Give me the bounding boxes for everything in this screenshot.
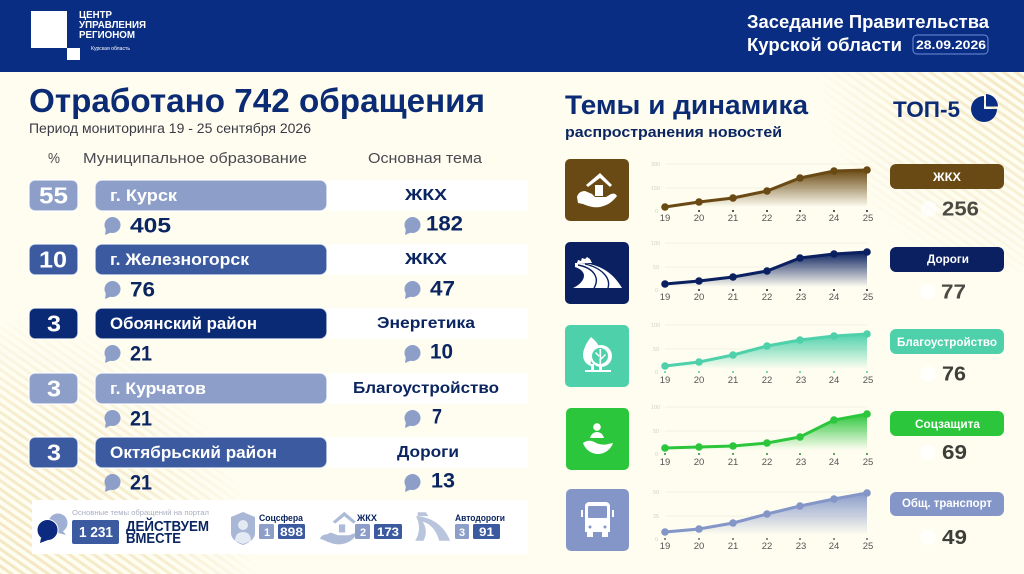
value: 77 [941, 280, 966, 304]
chart row: ЖКХ [565, 159, 1004, 224]
line chart: 24 [829, 292, 839, 303]
topic: Соцсфера: 898 [280, 525, 303, 539]
row: Курчатов: г. Курчатов [110, 380, 206, 398]
label pill [890, 411, 1004, 436]
line chart: 25 [863, 213, 873, 224]
chart row: Благоустройство [565, 323, 1004, 387]
line chart: 0 [655, 452, 658, 458]
line chart: 21 [728, 375, 738, 386]
value [920, 280, 966, 304]
line chart: 50 [653, 265, 659, 271]
row: Железногорск: ЖКХ [404, 251, 447, 268]
line chart: 23 [796, 375, 806, 386]
line chart: 50 [653, 429, 659, 435]
row: Железногорск [29, 244, 528, 302]
row: Курск: ЖКХ [404, 187, 447, 204]
line chart [651, 241, 873, 303]
row: Обоянский район: 21 [130, 342, 152, 366]
line chart: 19 [660, 541, 670, 552]
line chart: 25 [863, 375, 873, 386]
topic: Автодороги: Автодороги [455, 513, 505, 523]
icon: road [565, 242, 629, 304]
line chart: 21 [728, 541, 738, 552]
line chart: 25 [863, 541, 873, 552]
line chart [651, 323, 873, 386]
icon: house in hand [565, 159, 629, 221]
line chart: 100 [651, 405, 660, 411]
value [920, 526, 967, 549]
topic: Соцсфера [259, 513, 305, 539]
logo: Курская область [91, 46, 130, 52]
right heading: Темы и динамика [565, 90, 809, 120]
row: Железногорск: 47 [430, 276, 455, 300]
line chart: 50 [653, 347, 659, 353]
label pill: Общ. транспорт [902, 496, 992, 510]
line chart: 22 [762, 457, 772, 468]
line chart: 20 [694, 292, 704, 303]
line chart: 0 [655, 370, 658, 376]
row: Октябрьский район: Дороги [397, 444, 459, 461]
value [921, 198, 979, 220]
label pill: Соцзащита [915, 417, 980, 431]
line chart: 20 [694, 457, 704, 468]
line chart: 21 [728, 213, 738, 224]
value: 256 [942, 198, 979, 220]
line chart: 24 [829, 457, 839, 468]
line chart: 19 [660, 213, 670, 224]
chart row: Соцзащита [566, 405, 1004, 470]
value: 69 [942, 441, 967, 464]
row: Обоянский район: 10 [430, 340, 453, 364]
date badge: 28.09.2026 [916, 38, 986, 52]
logo [31, 10, 146, 60]
line chart: 23 [796, 292, 806, 303]
top-5 label: ТОП-5 [893, 97, 960, 122]
line chart: 20 [694, 375, 704, 386]
portal total: 1 231 [79, 524, 113, 541]
label pill: Дороги [927, 252, 969, 266]
right heading [565, 90, 809, 141]
label pill: ЖКХ [932, 170, 961, 184]
icon: pie chart [971, 94, 998, 122]
topic: ЖКХ: 173 [377, 525, 399, 539]
meeting title [747, 12, 990, 55]
line chart: 100 [651, 323, 660, 329]
value: 76 [942, 362, 966, 386]
value [920, 441, 967, 464]
header band [0, 0, 1024, 72]
table header [48, 150, 483, 167]
icon: person in hand [566, 408, 629, 470]
topic: Автодороги: 3 [459, 527, 465, 539]
row: Октябрьский район: Октябрьский район [110, 444, 277, 462]
line chart: 300 [651, 162, 660, 168]
line chart: 20 [694, 541, 704, 552]
table header: Основная тема [368, 150, 483, 167]
logo: РЕГИОНОМ [79, 30, 135, 41]
line chart: 0 [655, 209, 658, 215]
topic: Автодороги: 91 [479, 525, 494, 539]
line chart [651, 162, 873, 224]
row: Октябрьский район: 13 [431, 468, 455, 492]
line chart: 0 [655, 537, 658, 543]
topic: Соцсфера: 1 [264, 527, 270, 539]
row: Курчатов [29, 373, 528, 430]
line chart [653, 489, 873, 552]
line chart: 23 [796, 213, 806, 224]
main title: Отработано 742 обращения [29, 82, 485, 119]
line chart: 24 [829, 375, 839, 386]
icon: trees [565, 325, 629, 387]
line chart: 100 [651, 241, 660, 247]
topic: ЖКХ: 2 [360, 527, 366, 539]
logo: УПРАВЛЕНИЯ [79, 20, 146, 31]
row: Курчатов: 21 [130, 406, 152, 430]
line chart: 19 [660, 292, 670, 303]
monitoring period: Период мониторинга 19 - 25 сентября 2026 [29, 121, 311, 136]
row: Курчатов: Благоустройство [353, 380, 499, 397]
icon: house in hand [320, 512, 357, 544]
portal name: ДЕЙСТВУЕМ [126, 517, 209, 535]
label pill [890, 329, 1004, 354]
row: Железногорск: 10 [39, 246, 67, 272]
line chart: 24 [829, 213, 839, 224]
row: Курчатов: 7 [432, 404, 442, 428]
line chart: 22 [762, 541, 772, 552]
line chart: 22 [762, 213, 772, 224]
portal total [72, 520, 119, 544]
line chart: 21 [728, 457, 738, 468]
row: Октябрьский район: 21 [130, 470, 152, 494]
row: Обоянский район: 3 [47, 310, 61, 336]
line chart: 25 [653, 514, 659, 520]
label pill [890, 492, 1004, 516]
icon: shield person [231, 512, 255, 545]
topic: Соцсфера: Соцсфера [259, 513, 304, 523]
chart row: Дороги [565, 241, 1004, 304]
table header: % [48, 150, 60, 167]
line chart: 24 [829, 541, 839, 552]
row: Обоянский район [29, 308, 528, 366]
line chart: 22 [762, 292, 772, 303]
value [920, 362, 966, 386]
row: Курск: 182 [426, 212, 463, 236]
row: Курск [29, 180, 528, 238]
line chart: 20 [694, 213, 704, 224]
table header: Муниципальное образование [83, 150, 307, 167]
row: Курск: 405 [130, 214, 171, 238]
row: Железногорск: г. Железногорск [110, 251, 250, 269]
line chart: 19 [660, 457, 670, 468]
icon: bus [566, 489, 629, 551]
date badge [913, 35, 988, 54]
portal caption: Основные темы обращений на портал [72, 508, 209, 517]
row: Курск: г. Курск [110, 187, 178, 205]
portal name [126, 517, 209, 547]
line chart: 23 [796, 457, 806, 468]
label pill [890, 247, 1004, 272]
row: Железногорск: 76 [130, 278, 155, 302]
topic: ЖКХ [355, 513, 402, 539]
topic: ЖКХ: ЖКХ [356, 513, 377, 523]
icon: road [415, 512, 450, 541]
line chart [651, 405, 873, 468]
portal panel [32, 500, 528, 554]
line chart: 50 [653, 490, 659, 496]
right heading: распространения новостей [565, 124, 782, 141]
line chart: 25 [863, 292, 873, 303]
row: Октябрьский район [29, 437, 528, 494]
topic: Автодороги [455, 513, 505, 539]
line chart: 25 [863, 457, 873, 468]
line chart: 22 [762, 375, 772, 386]
line chart: 0 [655, 288, 658, 294]
value: 49 [942, 526, 967, 549]
label pill [890, 164, 1004, 189]
row: Октябрьский район: 3 [47, 440, 61, 466]
line chart: 21 [728, 292, 738, 303]
logo: ЦЕНТР [79, 10, 112, 21]
label pill: Благоустройство [897, 335, 997, 349]
line chart: 150 [651, 186, 660, 192]
chart row: Общ. транспорт [566, 489, 1004, 552]
line chart: 19 [660, 375, 670, 386]
row: Обоянский район: Обоянский район [110, 315, 257, 333]
line chart: 23 [796, 541, 806, 552]
row: Курск: 55 [39, 182, 68, 208]
meeting title: Курской области [747, 35, 902, 55]
icon: chat bubbles [37, 514, 68, 543]
meeting title: Заседание Правительства [747, 12, 990, 32]
row: Обоянский район: Энергетика [377, 315, 475, 332]
portal name: ВМЕСТЕ [126, 531, 181, 547]
row: Курчатов: 3 [47, 376, 61, 402]
